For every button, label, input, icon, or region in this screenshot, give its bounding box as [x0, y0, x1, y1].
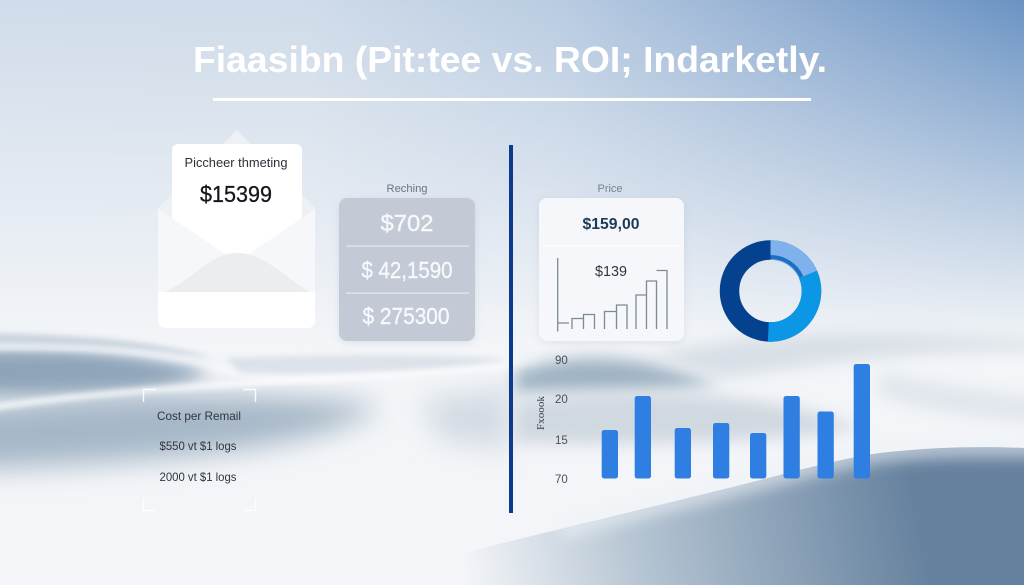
label: price: Price: [598, 183, 622, 195]
price card: [172, 144, 302, 262]
value: $159,00: $159,00: [582, 216, 640, 233]
bars: [602, 364, 870, 478]
line: first rate: $550 vt $1 logs: [160, 439, 236, 453]
vertical divider: [509, 145, 513, 513]
corner brackets: [144, 390, 256, 510]
y axis labels: 90: [555, 355, 568, 367]
panel: price card: [539, 183, 684, 341]
y axis labels: 20: [555, 394, 568, 406]
y axis labels: [555, 355, 568, 486]
y axis labels: 15: [555, 435, 568, 447]
value: $702: $702: [380, 210, 434, 236]
label: cost per remail: Cost per Remail: [157, 409, 241, 423]
panel: cost per email: [144, 390, 256, 510]
title: Fiaasibn (Pit:tee vs. ROI; Indarketly.: [193, 39, 827, 80]
panel: envelope with price card: [158, 130, 315, 328]
icon: envelope lower band: [158, 292, 315, 328]
y axis labels: 70: [555, 474, 568, 486]
icon: envelope inner fold: [165, 253, 310, 292]
line bar chart: [558, 258, 667, 332]
value: $139: $139: [595, 263, 627, 280]
price card: Piccheer thmeting: [184, 155, 288, 170]
segment: bright blue: [768, 274, 811, 332]
price card: $15399: [200, 181, 272, 207]
label: Reching: Reching: [386, 183, 428, 195]
line: second rate: 2000 vt $1 logs: [160, 470, 236, 484]
y axis title: Fxoook: [536, 396, 547, 430]
donut chart: [730, 250, 812, 332]
value: $ 275300: $ 275300: [362, 303, 450, 329]
panel: reching values: [339, 183, 475, 341]
title underline: [213, 98, 811, 101]
value: $ 42,1590: $ 42,1590: [362, 257, 452, 283]
icon: envelope back flap: [158, 130, 315, 220]
icon: envelope body: [158, 209, 315, 328]
segment: light blue: [770, 250, 808, 274]
bar chart: [536, 355, 870, 486]
